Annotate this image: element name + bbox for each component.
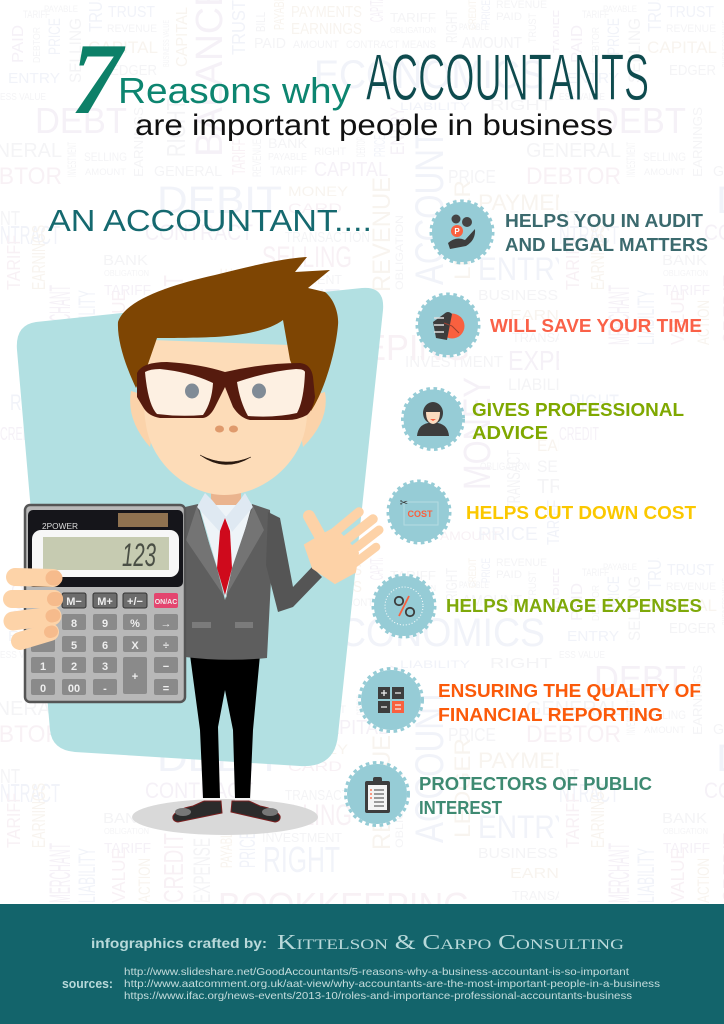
icon: hand with coins: P [454, 227, 460, 236]
icon: calculator keys [378, 687, 404, 713]
source links [124, 967, 660, 1002]
heading: an accountant: AN ACCOUNTANT.... [48, 203, 372, 238]
source links: http://www.slideshare.net/GoodAccountants/5-reasons-why-a-business-accountant-is-so-important [124, 967, 629, 978]
reason 4 [388, 481, 697, 543]
source links: https://www.ifac.org/news-events/2013-10/roles-and-importance-professional-accountants-business [124, 991, 632, 1002]
calculator keys: 1 [40, 661, 46, 673]
reason 5 [373, 575, 702, 637]
accountant character [118, 257, 379, 835]
trousers [190, 655, 260, 800]
sources label: sources: [62, 977, 113, 991]
calculator keys: M+ [97, 596, 113, 608]
label: HELPS MANAGE EXPENSES [446, 595, 702, 616]
reason 6 [360, 668, 701, 732]
hair [118, 257, 338, 411]
reason 1 [431, 201, 708, 263]
reason 1: AND LEGAL MATTERS [505, 234, 708, 255]
label: PROTECTORS OF PUBLIC [419, 773, 652, 794]
jacket sleeve [266, 512, 322, 612]
calculator keys: − [163, 661, 169, 673]
badge [388, 481, 450, 543]
icon: adviser [417, 402, 449, 436]
calculator [12, 505, 185, 702]
nose [215, 426, 238, 433]
brand: 2POWER [42, 521, 78, 531]
calculator keys: 8 [71, 618, 77, 630]
badge [431, 201, 493, 263]
calculator keys: 2 [71, 661, 77, 673]
calculator keys: + [132, 671, 138, 683]
calculator keys [31, 593, 178, 695]
floor shadow [132, 799, 318, 835]
label: WILL SAVE YOUR TIME [490, 315, 702, 336]
calculator body [25, 505, 185, 702]
reason 3: ADVICE [472, 422, 548, 443]
calculator keys: = [163, 683, 169, 695]
collar [197, 493, 253, 532]
label: HELPS CUT DOWN COST [466, 502, 697, 523]
raised hand [305, 512, 379, 583]
glasses [137, 362, 315, 420]
icon: clipboard [365, 777, 390, 813]
neck [211, 488, 241, 512]
badge [360, 668, 422, 732]
display bezel [32, 530, 179, 577]
title numeral 7: 7 [71, 23, 126, 136]
badge [346, 762, 408, 826]
socks [203, 798, 250, 803]
calculator keys: → [160, 618, 172, 630]
calculator keys: 0 [40, 683, 46, 695]
calculator keys: 9 [102, 618, 108, 630]
subtitle: are important people in business [135, 109, 613, 142]
teal backdrop panel [17, 288, 383, 766]
calculator keys: ON/AC [155, 599, 177, 606]
display value: 123 [122, 537, 156, 573]
badge [402, 388, 464, 450]
footer band [0, 904, 724, 1024]
calculator top panel [28, 510, 183, 587]
left shoe [173, 801, 222, 822]
reason 6: FINANCIAL REPORTING [438, 704, 663, 725]
reason 2 [417, 294, 702, 356]
calculator keys: ÷ [163, 640, 169, 652]
calculator keys: 00 [68, 683, 80, 695]
solar strip [118, 513, 168, 527]
icon: cost tag with scissors: ✂ [400, 498, 408, 509]
badge [373, 575, 435, 637]
source links: http://www.aatcomment.org.uk/aat-view/why-accountants-are-the-most-important-people-in-a-business [124, 979, 660, 990]
display screen [43, 537, 169, 570]
label: HELPS YOU IN AUDIT [505, 210, 704, 231]
icon: fist and clock [433, 312, 464, 340]
calculator keys: 5 [71, 640, 77, 652]
calculator keys: X [131, 640, 139, 652]
calculator keys: +/− [127, 596, 143, 608]
credit line: infographics crafted by: [91, 935, 267, 951]
tie [217, 518, 232, 595]
title [71, 23, 649, 142]
footer [0, 904, 724, 1024]
calculator keys: - [103, 683, 107, 695]
lapels [186, 506, 264, 596]
label: GIVES PROFESSIONAL [472, 399, 684, 420]
icon: hand with coins [448, 214, 475, 249]
badge [417, 294, 479, 356]
holding hand [12, 577, 56, 641]
face [144, 340, 307, 495]
ears [130, 391, 326, 447]
reason 7: INTEREST [419, 797, 503, 818]
icon: cost tag with scissors: COST [407, 509, 433, 519]
icon: cost tag with scissors [400, 498, 438, 525]
shirt [199, 505, 252, 598]
calculator keys: 3 [102, 661, 108, 673]
company name: Kittelson & Carpo Consulting [277, 930, 624, 954]
calculator keys: M− [66, 596, 82, 608]
mouth [200, 455, 251, 465]
icon: percent [385, 587, 423, 625]
jacket [185, 504, 272, 660]
reason 7 [346, 762, 652, 826]
pockets [192, 622, 253, 628]
calculator keys: 6 [102, 640, 108, 652]
reason 3 [402, 388, 684, 450]
calculator keys: % [130, 618, 140, 630]
label: ENSURING THE QUALITY OF [438, 680, 701, 701]
right shoe [231, 801, 280, 822]
eyes [185, 384, 266, 398]
title: reasons why: Reasons why [118, 70, 351, 111]
